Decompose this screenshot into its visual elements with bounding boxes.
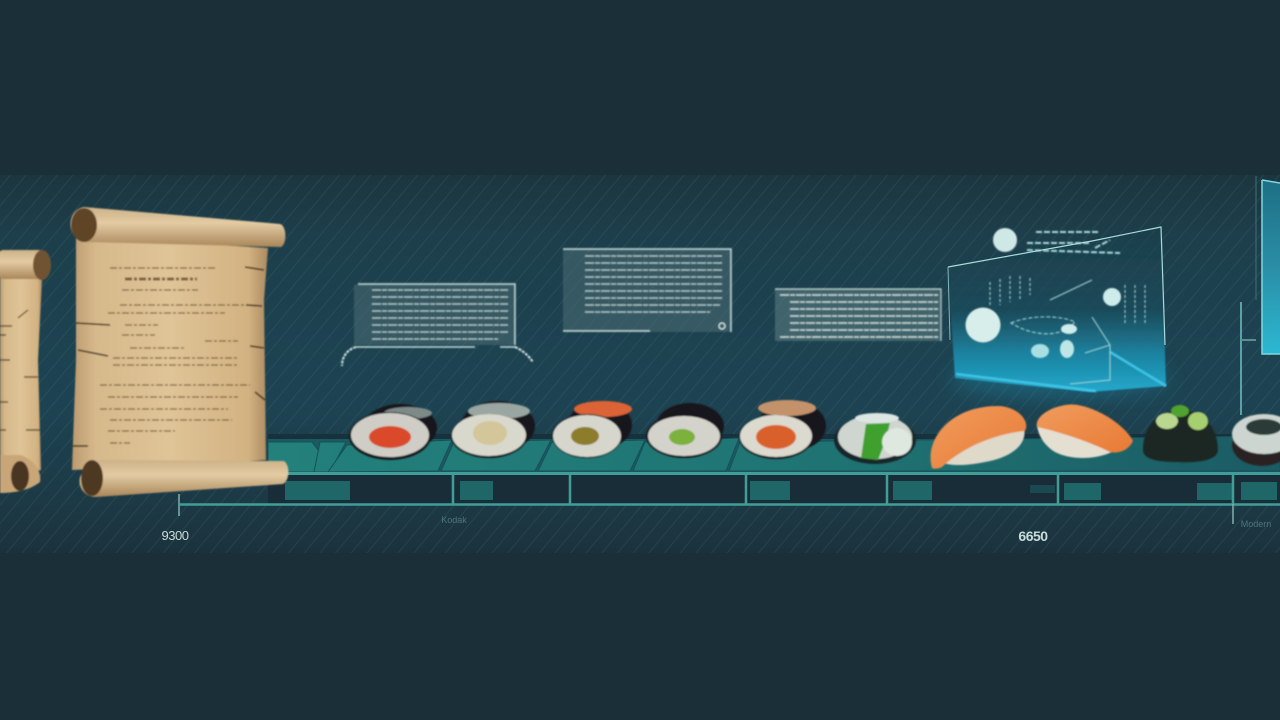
left scroll writing [0, 310, 40, 430]
hatched timeline band [0, 175, 1280, 553]
hologram bright base lines [956, 352, 1166, 391]
scroll cracks [72, 267, 265, 446]
timeline end ticks [179, 494, 1233, 524]
panel: text screen 1 [342, 284, 533, 366]
lower rail channel [268, 475, 1280, 504]
conveyor belt timeline [179, 434, 1280, 524]
panel: main scroll [70, 207, 288, 497]
scroll top roller [70, 207, 285, 247]
icon: salmon nigiri 1 [931, 406, 1026, 469]
panel: left scroll [0, 250, 51, 493]
icon: sushi roll 3 [552, 401, 632, 458]
icon: gunkan with greens [834, 413, 916, 464]
icon: sushi roll 2 [451, 401, 535, 458]
scroll writing [100, 268, 250, 443]
timeline caption left: Kodak [441, 515, 467, 525]
panel: holographic display [948, 227, 1166, 392]
belt back edge [268, 434, 1280, 439]
panel: right edge screen [1241, 176, 1280, 415]
icon: sushi roll cropped at edge [1232, 414, 1280, 466]
lighter channel blocks [285, 481, 1277, 500]
left scroll top roller [0, 250, 46, 279]
hologram sketch marks [990, 276, 1145, 384]
scroll bottom roller [80, 460, 288, 497]
belt tiles [268, 436, 1280, 472]
timeline label: start year: 9300 [162, 528, 189, 543]
hologram glow [950, 358, 1170, 398]
icon: sushi roll 4 [646, 403, 724, 458]
icon: salmon nigiri 2 [1037, 405, 1133, 458]
icon: seaweed ball with green topping [1143, 405, 1218, 462]
timeline label: later year: 6650 [1018, 528, 1048, 544]
icon: sushi roll 1 [349, 404, 437, 460]
rails and posts [180, 474, 1280, 504]
left scroll bottom roller [0, 455, 40, 493]
panel: text screen 2 [563, 249, 731, 332]
hologram clock icon [993, 228, 1017, 252]
timeline caption right: Modern [1241, 519, 1271, 529]
panel: text screen 3 [775, 289, 941, 341]
hologram white dots [966, 288, 1121, 358]
hologram header text marks [1027, 232, 1120, 253]
icon: sushi roll 5 [739, 400, 826, 459]
